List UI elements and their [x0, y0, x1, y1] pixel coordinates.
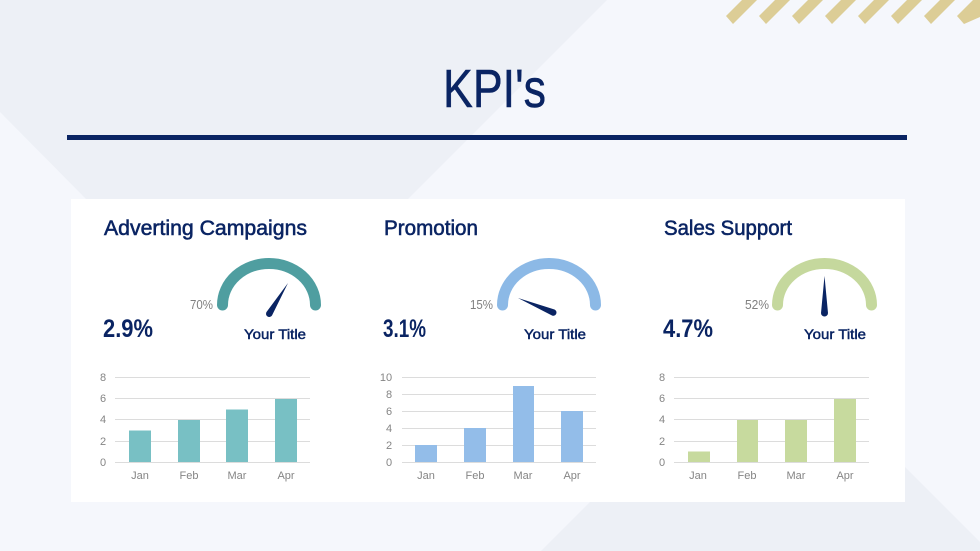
- heading: Sales Support: [664, 217, 792, 240]
- gauge: [190, 263, 316, 342]
- bar chart: [100, 372, 310, 482]
- bar chart: 0: [386, 457, 392, 469]
- gauge percent: 52%: [745, 297, 769, 312]
- gauge needle: [266, 283, 288, 317]
- gauge: [470, 263, 596, 342]
- gauge percent: 15%: [470, 297, 493, 312]
- bar chart: 2: [100, 436, 106, 448]
- bar chart: [659, 372, 869, 482]
- KPI value: 3.1%: [383, 315, 426, 343]
- title underline: [67, 135, 907, 140]
- title: KPI's: [443, 59, 546, 119]
- heading: Adverting Campaigns: [104, 217, 307, 240]
- bar chart: 0: [100, 457, 106, 469]
- bar chart: 8: [100, 372, 106, 384]
- bar chart: 2: [386, 440, 392, 452]
- gauge: [745, 263, 872, 342]
- decorative gold stripes: [726, 0, 980, 24]
- bar chart: Mar: [228, 470, 247, 482]
- main white panel: [71, 199, 905, 502]
- gauge label: Your Title: [244, 326, 306, 342]
- bar chart: Jan: [131, 470, 149, 482]
- KPI value: 4.7%: [663, 315, 713, 343]
- gauge needle: [821, 276, 828, 316]
- bar chart: 4: [659, 414, 665, 426]
- KPI value: 2.9%: [103, 315, 153, 343]
- bar chart: 4: [386, 423, 392, 435]
- bar chart: Mar: [514, 470, 533, 482]
- gauge label: Your Title: [804, 326, 866, 342]
- bar chart: [380, 372, 596, 482]
- bar chart: Jan: [689, 470, 707, 482]
- bar chart: Apr: [836, 470, 854, 482]
- bar chart: 6: [100, 393, 106, 405]
- bar chart: Mar: [787, 470, 806, 482]
- heading: Promotion: [384, 217, 478, 240]
- bar chart: 10: [380, 372, 392, 384]
- gauge percent: 70%: [190, 297, 213, 312]
- gauge label: Your Title: [524, 326, 586, 342]
- bar chart: 6: [659, 393, 665, 405]
- gauge needle: [518, 298, 556, 316]
- bar chart: Feb: [466, 470, 484, 482]
- panel: Promotion: [380, 217, 596, 482]
- bar chart: Feb: [738, 470, 756, 482]
- bar chart: Feb: [180, 470, 198, 482]
- bar chart: Jan: [417, 470, 435, 482]
- bar chart: 0: [659, 457, 665, 469]
- bar chart: Apr: [563, 470, 581, 482]
- bar chart: 2: [659, 436, 665, 448]
- bar chart: 4: [100, 414, 106, 426]
- bar chart: Apr: [277, 470, 295, 482]
- bar chart: 8: [659, 372, 665, 384]
- bar chart: 8: [386, 389, 392, 401]
- panel: Sales Support: [659, 217, 872, 482]
- bar chart: 6: [386, 406, 392, 418]
- panel: Adverting Campaigns: [100, 217, 316, 482]
